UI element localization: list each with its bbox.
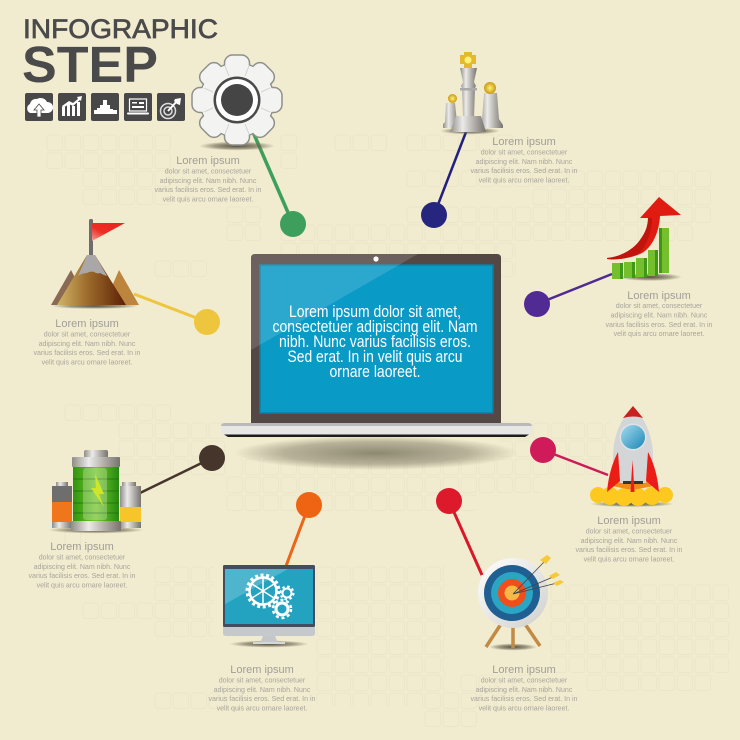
screen text: ornare laoreet.	[330, 363, 420, 381]
connector: crimson	[543, 450, 608, 475]
title line: infographic: INFOGRAPHIC	[23, 14, 218, 44]
text: gear: adipiscing elit. Nam nibh. Nunc	[160, 178, 257, 185]
text: gear: varius facilisis eros. Sed erat. In in	[155, 187, 262, 194]
icon row	[25, 93, 185, 121]
text: monitor: Lorem ipsum	[230, 664, 294, 676]
icon: rocket	[590, 406, 674, 507]
title line: step: STEP	[22, 36, 158, 93]
dot: purple	[524, 291, 550, 317]
text: mountain: adipiscing elit. Nam nibh. Nunc	[39, 341, 136, 348]
screen text: consectetuer adipiscing elit. Nam	[272, 318, 478, 336]
icon: batteries	[48, 450, 144, 534]
text: mountain: varius facilisis eros. Sed erat. In in	[34, 350, 141, 357]
text: monitor: varius facilisis eros. Sed erat. In in	[209, 696, 316, 703]
icon: target and arrow	[157, 93, 185, 121]
text: rocket	[576, 515, 683, 564]
dot: yellow	[194, 309, 220, 335]
dot: crimson	[530, 437, 556, 463]
connector: orange	[286, 505, 309, 566]
text: chart	[606, 290, 713, 338]
webcam	[373, 256, 379, 262]
text: monitor: adipiscing elit. Nam nibh. Nunc	[214, 687, 311, 694]
text: gear: Lorem ipsum	[176, 155, 240, 167]
icon: laptop	[124, 93, 152, 121]
text: chess: Lorem ipsum	[492, 136, 556, 148]
connector: navy	[434, 132, 466, 215]
connector: purple	[537, 274, 612, 304]
screen text	[272, 303, 478, 381]
icon: rising bars	[58, 93, 86, 121]
text: chess: dolor sit amet, consectetuer	[481, 150, 568, 156]
text: battery: velit quis arcu ornare laoreet.	[37, 582, 127, 590]
icon: cloud upload	[25, 93, 53, 121]
text: rocket: adipiscing elit. Nam nibh. Nunc	[581, 538, 678, 545]
text: chart: varius facilisis eros. Sed erat. In in	[606, 322, 713, 329]
text: rocket: varius facilisis eros. Sed erat. In in	[576, 547, 683, 554]
dot: red	[436, 488, 462, 514]
laptop base	[221, 423, 532, 437]
icon: target	[478, 555, 564, 650]
text: gear	[155, 155, 262, 204]
text: battery: dolor sit amet, consectetuer	[39, 554, 126, 562]
icon: chess pieces	[440, 52, 503, 134]
text: monitor: dolor sit amet, consectetuer	[219, 678, 306, 684]
text: chart: dolor sit amet, consectetuer	[616, 303, 703, 310]
icon: mountain with flag	[51, 219, 139, 309]
text: target: velit quis arcu ornare laoreet.	[479, 706, 569, 712]
text: rocket: velit quis arcu ornare laoreet.	[584, 556, 674, 564]
text: chart: Lorem ipsum	[627, 290, 691, 302]
icon: bar chart	[91, 93, 119, 121]
text: gear: velit quis arcu ornare laoreet.	[163, 196, 253, 204]
connector: yellow	[134, 294, 207, 322]
laptop screen	[260, 265, 493, 413]
text: gear: dolor sit amet, consectetuer	[165, 168, 252, 176]
dot: green	[280, 211, 306, 237]
dot: navy	[421, 202, 447, 228]
text: battery: adipiscing elit. Nam nibh. Nunc	[34, 564, 131, 571]
text: rocket: Lorem ipsum	[597, 515, 661, 527]
text: mountain: velit quis arcu ornare laoreet.	[42, 360, 132, 366]
icon: gear	[192, 55, 282, 150]
screen glare	[251, 254, 418, 350]
text: mountain: dolor sit amet, consectetuer	[44, 332, 131, 338]
text: target: Lorem ipsum	[492, 664, 556, 676]
text: target	[471, 664, 578, 712]
central laptop	[221, 254, 532, 470]
dot: brown	[199, 445, 225, 471]
text: chess	[471, 136, 578, 184]
screen text: Lorem ipsum dolor sit amet,	[289, 303, 461, 321]
laptop shadow	[234, 436, 518, 470]
text: chess: velit quis arcu ornare laoreet.	[479, 178, 569, 184]
text: target: adipiscing elit. Nam nibh. Nunc	[476, 687, 573, 694]
icon: growth chart	[607, 197, 682, 281]
text: chess: adipiscing elit. Nam nibh. Nunc	[476, 159, 573, 166]
screen text: Sed erat. In in velit quis arcu	[288, 348, 462, 366]
text: monitor	[209, 664, 316, 712]
connector: brown	[140, 458, 212, 493]
connector: red	[449, 501, 482, 575]
text: rocket: dolor sit amet, consectetuer	[586, 528, 673, 536]
text: monitor: velit quis arcu ornare laoreet.	[217, 706, 307, 712]
text: chess: varius facilisis eros. Sed erat. In in	[471, 168, 578, 175]
text: chart: velit quis arcu ornare laoreet.	[614, 331, 704, 338]
title	[22, 14, 218, 93]
text: battery: varius facilisis eros. Sed erat. In in	[29, 573, 136, 580]
dot: orange	[296, 492, 322, 518]
text: mountain	[34, 318, 141, 366]
text: battery: Lorem ipsum	[50, 541, 114, 553]
connector: green	[253, 132, 293, 224]
text: battery	[29, 541, 136, 590]
text: chart: adipiscing elit. Nam nibh. Nunc	[611, 312, 708, 320]
screen text: nibh. Nunc varius facilisis eros.	[279, 333, 471, 351]
text: mountain: Lorem ipsum	[55, 318, 119, 330]
icon: monitor with gears	[223, 565, 315, 648]
laptop lid	[251, 254, 501, 424]
text: target: varius facilisis eros. Sed erat. In in	[471, 696, 578, 703]
text: target: dolor sit amet, consectetuer	[481, 678, 568, 684]
